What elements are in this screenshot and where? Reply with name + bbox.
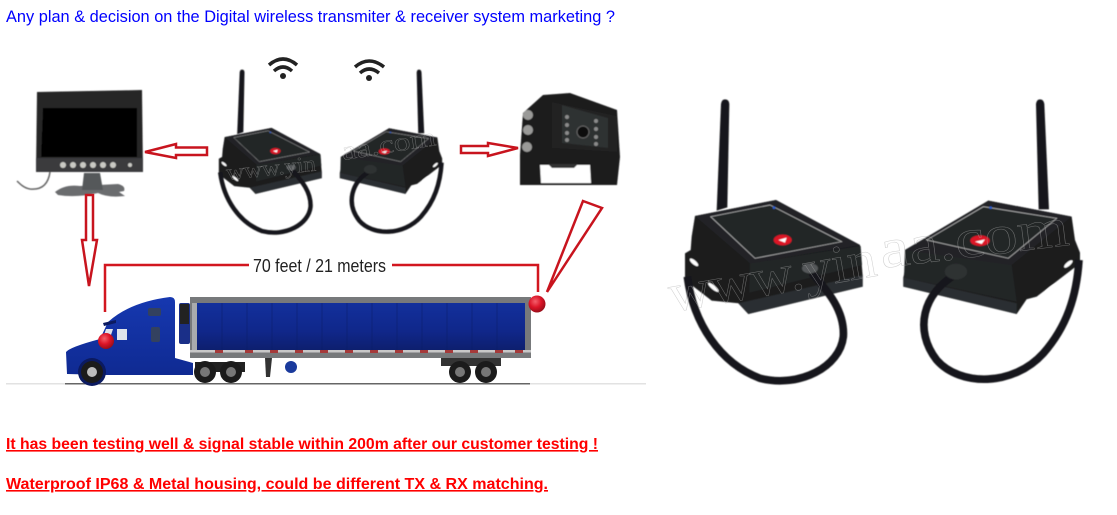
icon: wifi signal right (355, 61, 384, 81)
arrow: rear sensor to camera (547, 201, 602, 292)
trailer (190, 297, 531, 377)
watermark: small transmitter: aa.com (339, 122, 438, 166)
callout: housing features: Waterproof IP68 & Metal housing, could be different TX & RX matching. (6, 476, 548, 493)
watermark: small receiver: www.yin (225, 151, 317, 185)
truck cab (66, 297, 245, 386)
icon: wifi signal left (269, 59, 297, 79)
icon: monitor (17, 90, 143, 197)
title: Any plan & decision on the Digital wireless transmiter & receiver system marketing ? (6, 8, 615, 26)
watermark: large receiver: www.yin (664, 228, 881, 324)
icon: small receiver unit (219, 70, 322, 233)
arrow: transmitter to monitor (145, 144, 207, 158)
photo: large receiver unit (685, 99, 863, 381)
wheels (81, 361, 497, 383)
distance label: 70 feet / 21 meters (253, 256, 386, 276)
icon: small transmitter unit (340, 70, 442, 232)
ground line (6, 383, 646, 384)
truck diagram (6, 296, 646, 386)
arrow: transmitter to camera (461, 143, 518, 156)
watermark: large transmitter: aa.com (876, 196, 1072, 281)
sensor ball rear (528, 296, 546, 312)
distance bracket (105, 256, 538, 312)
arrow: monitor down to truck (82, 195, 97, 286)
photo: large transmitter unit (903, 99, 1080, 379)
sensor ball front (98, 333, 114, 349)
icon: camera (520, 93, 620, 185)
callout: testing result: It has been testing well & signal stable within 200m after our customer testing ! (6, 436, 598, 453)
